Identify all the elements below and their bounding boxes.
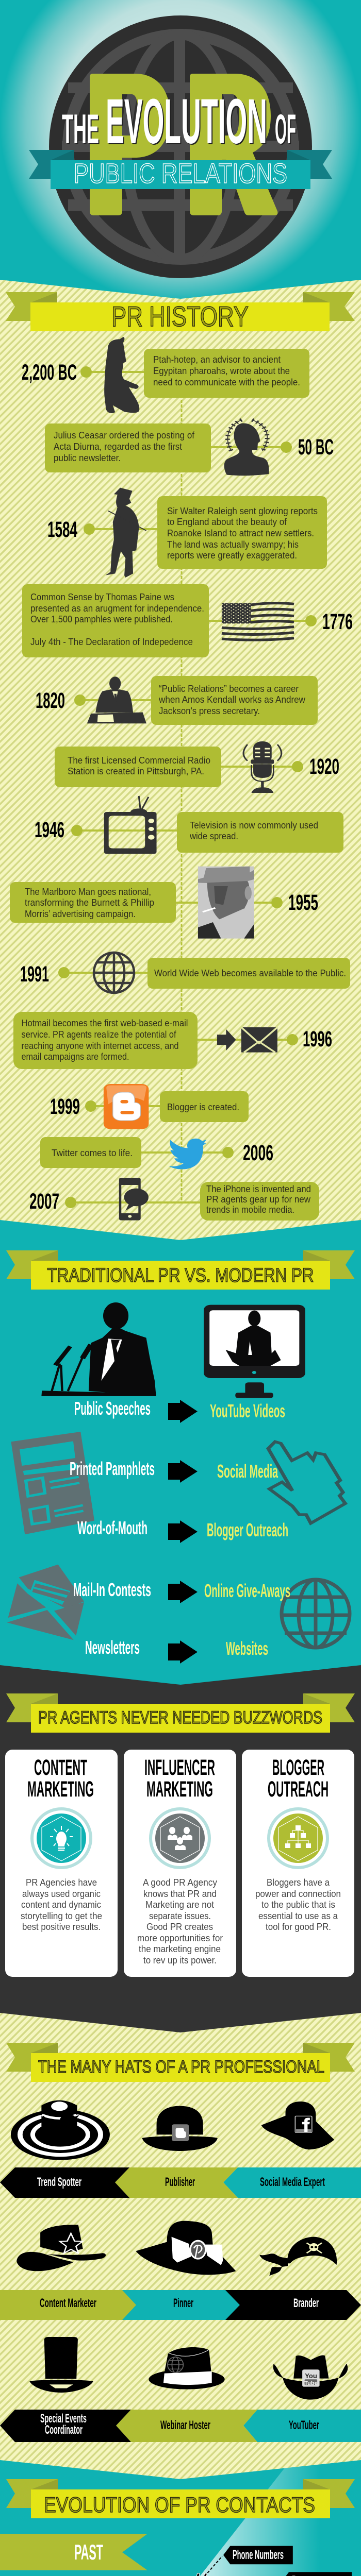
card: blogger outreach: essential to use as a: [258, 1910, 338, 1921]
timeline item: 1999: Blogger is created.: [167, 1101, 239, 1112]
comparison row: word of mouth to blogger outreach: [77, 1517, 288, 1543]
timeline item: 1584: [47, 488, 327, 578]
ribbon row 3 of hat labels: Coordinator: [45, 2423, 83, 2437]
icon: arrow and envelope: [217, 1027, 277, 1053]
ribbon: public relations: PUBLIC RELATIONS: [74, 158, 287, 189]
illustration: speaker at podium: [41, 1302, 156, 1396]
heading ribbon: PR agents never needed buzzwords: [6, 1693, 355, 1733]
timeline item: 1584: reports were greatly exaggerated.: [167, 550, 297, 561]
card: content marketing: CONTENT: [34, 1755, 87, 1780]
card: blogger outreach: [242, 1750, 354, 1977]
header background: [0, 0, 361, 299]
hat: fedora with globe: [149, 2347, 225, 2389]
timeline item: 1820: 1820: [36, 688, 65, 713]
comparison row: pamphlets to social media: [70, 1458, 278, 1483]
ribbon: past: PAST: [74, 2540, 103, 2564]
timeline item: 1991: World Wide Web becomes available to the Public.: [154, 968, 346, 978]
timeline item: 1776: Common Sense by Thomas Paine ws: [30, 591, 174, 602]
icon: light bulb badge: [32, 1809, 91, 1868]
panel background: buzzwords: [0, 1664, 361, 2032]
timeline item: 1955: Morris’ advertising campaign.: [25, 908, 136, 919]
timeline item: 2006: 2006: [243, 1141, 273, 1165]
timeline item: 1584: 1584: [47, 517, 77, 542]
past contacts: dashed connectors and tags: Phone Numbers: [233, 2548, 284, 2562]
card: content marketing: [5, 1750, 118, 1977]
card: influencer marketing: A good PR Agency: [143, 1877, 218, 1888]
card: influencer marketing: INFLUENCER: [144, 1755, 215, 1780]
timeline item: 1584: The land was actually swampy; his: [167, 539, 299, 550]
card: influencer marketing: the marketing engine: [139, 1943, 221, 1954]
ribbon: past: [0, 2534, 147, 2570]
timeline item: 1955: 1955: [288, 890, 318, 915]
card: content marketing: content and dynamic: [21, 1899, 101, 1910]
header: globe and title: [29, 15, 332, 278]
timeline item: 1946: [35, 796, 343, 854]
timeline item: 1820: [36, 676, 318, 725]
timeline item: 1996: Hotmail becomes the first web-based e-mail: [22, 1018, 188, 1028]
header: globe and title: OF: [275, 106, 296, 152]
comparison row: speeches to videos: [74, 1398, 285, 1423]
title: The Evolution of: [62, 87, 296, 157]
icon: people badge: [151, 1809, 209, 1868]
timeline item: 2,200 BC: Egypitan pharoahs, wrote about the: [153, 365, 290, 376]
timeline item: 1996: [13, 1012, 332, 1069]
comparison row: speeches to videos: Public Speeches: [74, 1398, 151, 1419]
ribbon row 3 of hat labels: Webinar Hoster: [160, 2418, 210, 2432]
icon: org chart badge: [269, 1809, 327, 1868]
icon: Blogger logo: [104, 1084, 149, 1129]
card: influencer marketing: MARKETING: [146, 1777, 213, 1802]
timeline item: 1996: service. PR agents realize the potential of: [22, 1029, 176, 1040]
card: influencer marketing: knows that PR and: [143, 1888, 217, 1899]
watermark icon: pixel hand cursor: [268, 1442, 346, 1523]
timeline item: 1999: [50, 1084, 249, 1129]
timeline spine: [180, 400, 183, 1202]
hat: top hat: [29, 2337, 93, 2393]
icon: microphone: [243, 741, 282, 793]
timeline item: 1991: 1991: [20, 962, 49, 987]
panel background: many hats: [0, 2009, 361, 2479]
ribbon row 3 of hat labels: YouTuber: [289, 2418, 319, 2432]
icon: American flag: [222, 603, 294, 640]
timeline item: 50 BC: 50 BC: [298, 435, 334, 460]
timeline item: 1584: Sir Walter Raleigh sent glowing reports: [167, 505, 318, 516]
icon: man at desk: [87, 676, 146, 723]
ribbon row 2 of hat labels: [0, 2290, 361, 2320]
timeline item: 1920: Station is created in Pittsburgh, PA.: [68, 766, 204, 776]
hat: cowboy with YouTube badge: [274, 2355, 347, 2400]
hat: wide brim with bow and Pinterest badge: [136, 2221, 236, 2275]
card: content marketing: storytelling to get the: [21, 1910, 102, 1921]
big PR letters: [90, 74, 170, 215]
card: blogger outreach: to the public that is: [261, 1899, 335, 1910]
icon: globe: [94, 953, 134, 993]
timeline item: 2006: Twitter comes to life.: [52, 1147, 133, 1158]
timeline item: 1776: Over 1,500 pamphles were published.: [30, 614, 173, 624]
panel background: PR history: [0, 278, 361, 1240]
YouTube badge text: Tube: [304, 2380, 318, 2386]
card: content marketing: MARKETING: [27, 1777, 94, 1802]
ribbon: public relations: [29, 150, 332, 189]
timeline item: 1820: when Amos Kendall works as Andrew: [158, 694, 306, 705]
timeline item: 1955: The Marlboro Man goes national,: [25, 886, 151, 897]
watermark icon: globe: [282, 1580, 350, 1648]
comparison row: speeches to videos: YouTube Videos: [210, 1400, 285, 1421]
timeline item: 1776: July 4th - The Declaration of Indepedence: [30, 636, 193, 647]
icon: phone with speech bubble: [119, 1178, 149, 1221]
timeline item: 1920: The first Licensed Commercial Radio: [68, 755, 210, 766]
card: influencer marketing: Marketing are not: [145, 1899, 214, 1910]
comparison row: pamphlets to social media: Printed Pamphlets: [70, 1458, 155, 1479]
watermark icon: pamphlet: [11, 1432, 94, 1534]
timeline item: 1820: “Public Relations” becomes a career: [159, 683, 299, 694]
icon: pharaoh silhouette: [104, 337, 139, 413]
timeline item: 1776: [22, 584, 353, 657]
timeline item: 1955: transforming the Burnett & Phillip: [25, 897, 154, 908]
comparison row: mail-in contests to give-aways: [73, 1579, 290, 1603]
heading ribbon: PR History: [6, 292, 355, 332]
timeline item: 1946: Television is now commonly used: [190, 820, 318, 831]
timeline item: 50 BC: Acta Diurna, regarded as the first: [54, 441, 182, 452]
card: influencer marketing: separate issues.: [149, 1910, 211, 1921]
YouTube badge text: [304, 2372, 318, 2386]
heading ribbon: evolution of PR contacts: [6, 2479, 355, 2518]
past contacts: dashed connectors and tags: [161, 2546, 352, 2576]
card: blogger outreach: Bloggers have a: [267, 1877, 330, 1888]
watermark icon: envelope: [7, 1565, 84, 1640]
YouTube badge text: You: [305, 2372, 317, 2380]
timeline item: 1946: 1946: [35, 818, 64, 842]
hat: pirate bandana with skull: [259, 2237, 337, 2276]
heading ribbon: the many hats of a PR professional: [6, 2043, 355, 2082]
heading ribbon: PR History: PR HISTORY: [111, 300, 249, 332]
photo: Marlboro Man: [198, 867, 254, 939]
timeline item: 2006: [40, 1137, 273, 1170]
ribbon row 2 of hat labels: Brander: [293, 2296, 319, 2310]
card: blogger outreach: power and connection: [255, 1888, 341, 1899]
timeline item: 2007: The iPhone is invented and: [206, 1183, 311, 1194]
panel background: traditional vs modern: [0, 1216, 361, 1685]
heading ribbon: Traditional PR vs. Modern PR: [6, 1250, 355, 1290]
timeline item: 1996: reaching anyone with internet access, and: [22, 1040, 178, 1051]
comparison row: pamphlets to social media: Social Media: [217, 1461, 278, 1482]
timeline item: 2,200 BC: 2,200 BC: [22, 360, 77, 385]
ribbon row 1 of hat labels: [0, 2167, 361, 2198]
illustration: monitor with presenter: [204, 1305, 305, 1398]
ribbon row 3 of hat labels: [0, 2410, 361, 2442]
timeline item: 1920: [55, 741, 339, 793]
globe: [49, 15, 312, 278]
heading ribbon: evolution of PR contacts: EVOLUTION OF PR CONTACTS: [44, 2493, 315, 2517]
card: influencer marketing: more opportunities for: [137, 1933, 223, 1943]
timeline item: 1820: Jackson's press secretary.: [159, 705, 260, 716]
comparison row: word of mouth to blogger outreach: Word-of-Mouth: [77, 1517, 147, 1538]
timeline item: 1996: 1996: [303, 1027, 332, 1052]
timeline item: 2007: PR agents gear up for new: [206, 1194, 311, 1205]
ribbon row 2 of hat labels: Pinner: [173, 2296, 193, 2310]
icon: Twitter bird: [169, 1139, 206, 1170]
comparison row: newsletters to websites: Newsletters: [85, 1637, 140, 1658]
hat: striped sun hat with Twitter bird: [11, 2100, 110, 2160]
icon: Caesar bust with laurel: [224, 420, 269, 476]
comparison row: newsletters to websites: [85, 1637, 268, 1664]
timeline item: 50 BC: public newsletter.: [54, 452, 121, 463]
timeline item: 2,200 BC: Ptah-hotep, an advisor to ancient: [153, 354, 281, 365]
light beam from rolodex: [161, 2463, 361, 2576]
comparison row: newsletters to websites: Websites: [226, 1638, 268, 1659]
timeline item: 1776: presented as an arugment for independence.: [30, 603, 204, 614]
timeline item: 1584: Roanoke Island to attract new settlers.: [167, 528, 314, 538]
timeline item: 2007: trends in mobile media.: [206, 1204, 294, 1215]
ribbon row 3 of hat labels: Special Events: [40, 2412, 87, 2426]
timeline item: 2007: [29, 1178, 319, 1221]
card: influencer marketing: to rev up its power.: [143, 1955, 217, 1965]
icon: television: [104, 796, 157, 854]
timeline item: 50 BC: [45, 420, 334, 476]
comparison row: mail-in contests to give-aways: Mail-In Contests: [73, 1579, 151, 1600]
timeline item: 2007: 2007: [29, 1189, 59, 1214]
hat: sheriff hat with star: [17, 2225, 106, 2271]
card: content marketing: always used organic: [22, 1888, 101, 1899]
timeline item: 1991: [20, 953, 350, 993]
panel background: evolution of contacts: [0, 2452, 361, 2576]
hat: bowler with Blogger badge: [142, 2106, 218, 2151]
card: influencer marketing: Good PR creates: [146, 1921, 213, 1932]
timeline item: 1999: 1999: [50, 1094, 80, 1119]
timeline item: 2,200 BC: [22, 337, 309, 413]
timeline item: 1996: email campaigns are formed.: [22, 1051, 129, 1062]
card: blogger outreach: tool for good PR.: [266, 1921, 331, 1932]
timeline item: 2,200 BC: need to communicate with the people.: [153, 377, 300, 387]
card: content marketing: PR Agencies have: [26, 1877, 97, 1888]
ribbon row 1 of hat labels: Trend Spotter: [37, 2175, 81, 2189]
comparison row: word of mouth to blogger outreach: Blogger Outreach: [207, 1519, 288, 1540]
timeline item: 1946: wide spread.: [189, 831, 238, 841]
timeline item: 1584: to England about the beauty of: [167, 516, 287, 527]
timeline item: 1955: [10, 867, 318, 939]
card: influencer marketing: [124, 1750, 236, 1977]
timeline item: 50 BC: Julius Ceasar ordered the posting of: [54, 430, 195, 440]
ribbon row 2 of hat labels: Content Marketer: [40, 2296, 96, 2310]
title: The Evolution of: THE: [62, 106, 99, 152]
hat: bucket hat with Facebook badge: [261, 2102, 334, 2149]
card: content marketing: best positive results.: [22, 1921, 101, 1932]
ribbon row 1 of hat labels: Publisher: [165, 2175, 195, 2189]
icon: Walter Raleigh silhouette: [105, 488, 146, 578]
timeline item: 1920: 1920: [309, 754, 339, 779]
